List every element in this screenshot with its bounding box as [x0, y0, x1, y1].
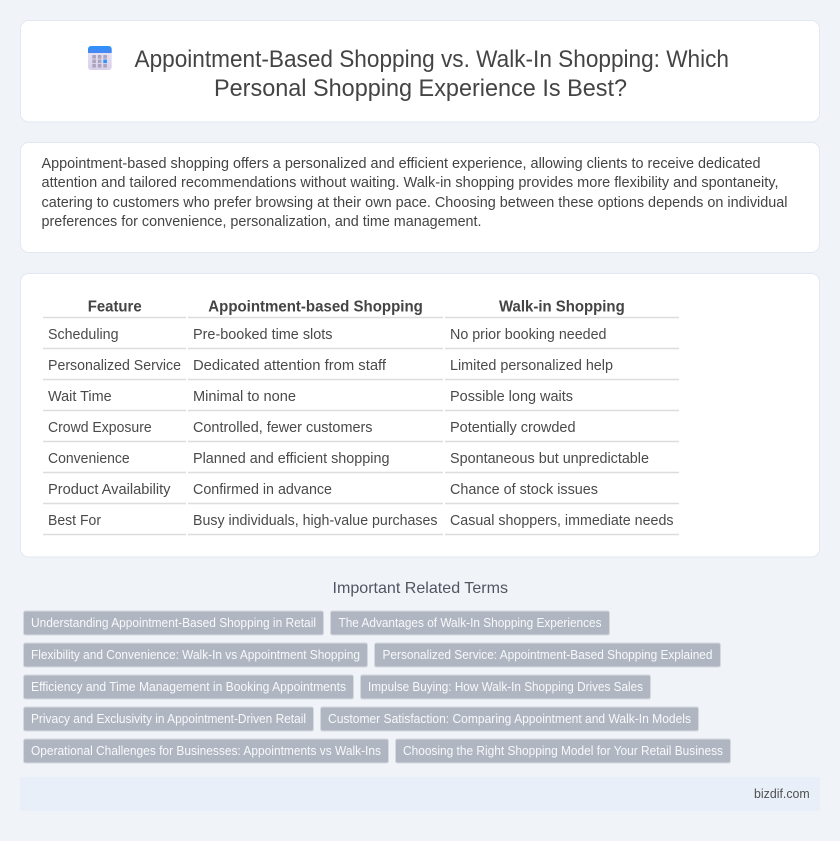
intro text block: catering to customers who prefer browsing at their own pace. Choosing between these options depends on individual — [42, 195, 788, 211]
row: convenience: Planned and efficient shopping — [193, 451, 390, 467]
row: product availability: Confirmed in advance — [193, 482, 332, 498]
row: wait time: Minimal to none — [193, 389, 296, 405]
row: best for: Casual shoppers, immediate needs — [450, 513, 674, 529]
row: personalized service: Dedicated attention from staff — [193, 358, 387, 374]
intro text block: preferences for convenience, personalization, and time management. — [42, 214, 482, 230]
panel: intro paragraph — [20, 142, 820, 252]
chip: Choosing the Right Shopping Model for Your Retail Business — [403, 743, 723, 758]
chip: Impulse Buying: How Walk-In Shopping Drives Sales — [368, 679, 643, 694]
row: convenience — [48, 451, 649, 467]
table header row: Appointment-based Shopping — [208, 298, 423, 316]
chip — [24, 707, 314, 731]
row: best for — [48, 513, 674, 529]
row: product availability: Chance of stock issues — [450, 482, 598, 498]
title: Appointment-Based Shopping vs. Walk-In Shopping: Which — [134, 46, 729, 73]
row: crowd exposure: Crowd Exposure — [48, 420, 152, 436]
table header row: Feature — [88, 298, 142, 316]
chip: Customer Satisfaction: Comparing Appointment and Walk-In Models — [328, 711, 691, 726]
chip — [374, 643, 720, 667]
row: wait time: Wait Time — [48, 389, 112, 405]
row: scheduling: No prior booking needed — [450, 327, 606, 343]
chip — [24, 675, 354, 699]
row: best for: Best For — [48, 513, 101, 529]
chip — [360, 675, 650, 699]
chip — [24, 611, 324, 635]
row: scheduling: Scheduling — [48, 327, 118, 343]
chip: Privacy and Exclusivity in Appointment-Driven Retail — [31, 711, 306, 726]
row: wait time — [48, 389, 573, 405]
row: scheduling: Pre-booked time slots — [193, 327, 332, 343]
row: product availability: Product Availability — [48, 482, 171, 498]
related term chips — [24, 611, 730, 763]
row: crowd exposure: Controlled, fewer customers — [193, 420, 372, 436]
chip: Personalized Service: Appointment-Based Shopping Explained — [382, 647, 712, 662]
chip — [330, 611, 610, 635]
intro text block: attention and tailored recommendations without waiting. Walk-in shopping provides more flexibility and spontaneity, — [42, 175, 778, 191]
row: convenience: Convenience — [48, 451, 130, 467]
chip — [396, 739, 730, 763]
chip: Flexibility and Convenience: Walk-In vs Appointment Shopping — [31, 647, 360, 662]
icon: calendar — [88, 46, 112, 70]
row: convenience: Spontaneous but unpredictable — [450, 451, 649, 467]
row: wait time: Possible long waits — [450, 389, 573, 405]
chip — [320, 707, 698, 731]
header panel — [20, 20, 820, 122]
footer source text: bizdif.com — [754, 787, 810, 801]
chip — [24, 643, 368, 667]
table header row: Walk-in Shopping — [499, 298, 625, 316]
table header row — [88, 298, 625, 316]
row: best for: Busy individuals, high-value purchases — [193, 513, 438, 529]
row: scheduling — [48, 327, 606, 343]
title: Personal Shopping Experience Is Best? — [214, 75, 627, 102]
chip: The Advantages of Walk-In Shopping Experiences — [338, 615, 602, 630]
row: personalized service: Personalized Service — [48, 358, 181, 374]
row: crowd exposure: Potentially crowded — [450, 420, 576, 436]
intro text block: Appointment-based shopping offers a personalized and efficient experience, allowing clients to receive dedicated — [42, 156, 760, 172]
row: personalized service: Limited personalized help — [450, 358, 613, 374]
panel: comparison table — [20, 274, 820, 557]
chip: Understanding Appointment-Based Shopping in Retail — [31, 615, 316, 630]
chip: Operational Challenges for Businesses: Appointments vs Walk-Ins — [31, 743, 381, 758]
title — [134, 46, 729, 102]
chip: Efficiency and Time Management in Booking Appointments — [31, 679, 346, 694]
row: crowd exposure — [48, 420, 576, 436]
heading: important related terms: Important Related Terms — [332, 580, 508, 597]
footer bar — [20, 777, 820, 811]
chip — [24, 739, 388, 763]
row: personalized service — [48, 358, 613, 374]
row: product availability — [48, 482, 598, 498]
intro text block — [42, 156, 788, 230]
